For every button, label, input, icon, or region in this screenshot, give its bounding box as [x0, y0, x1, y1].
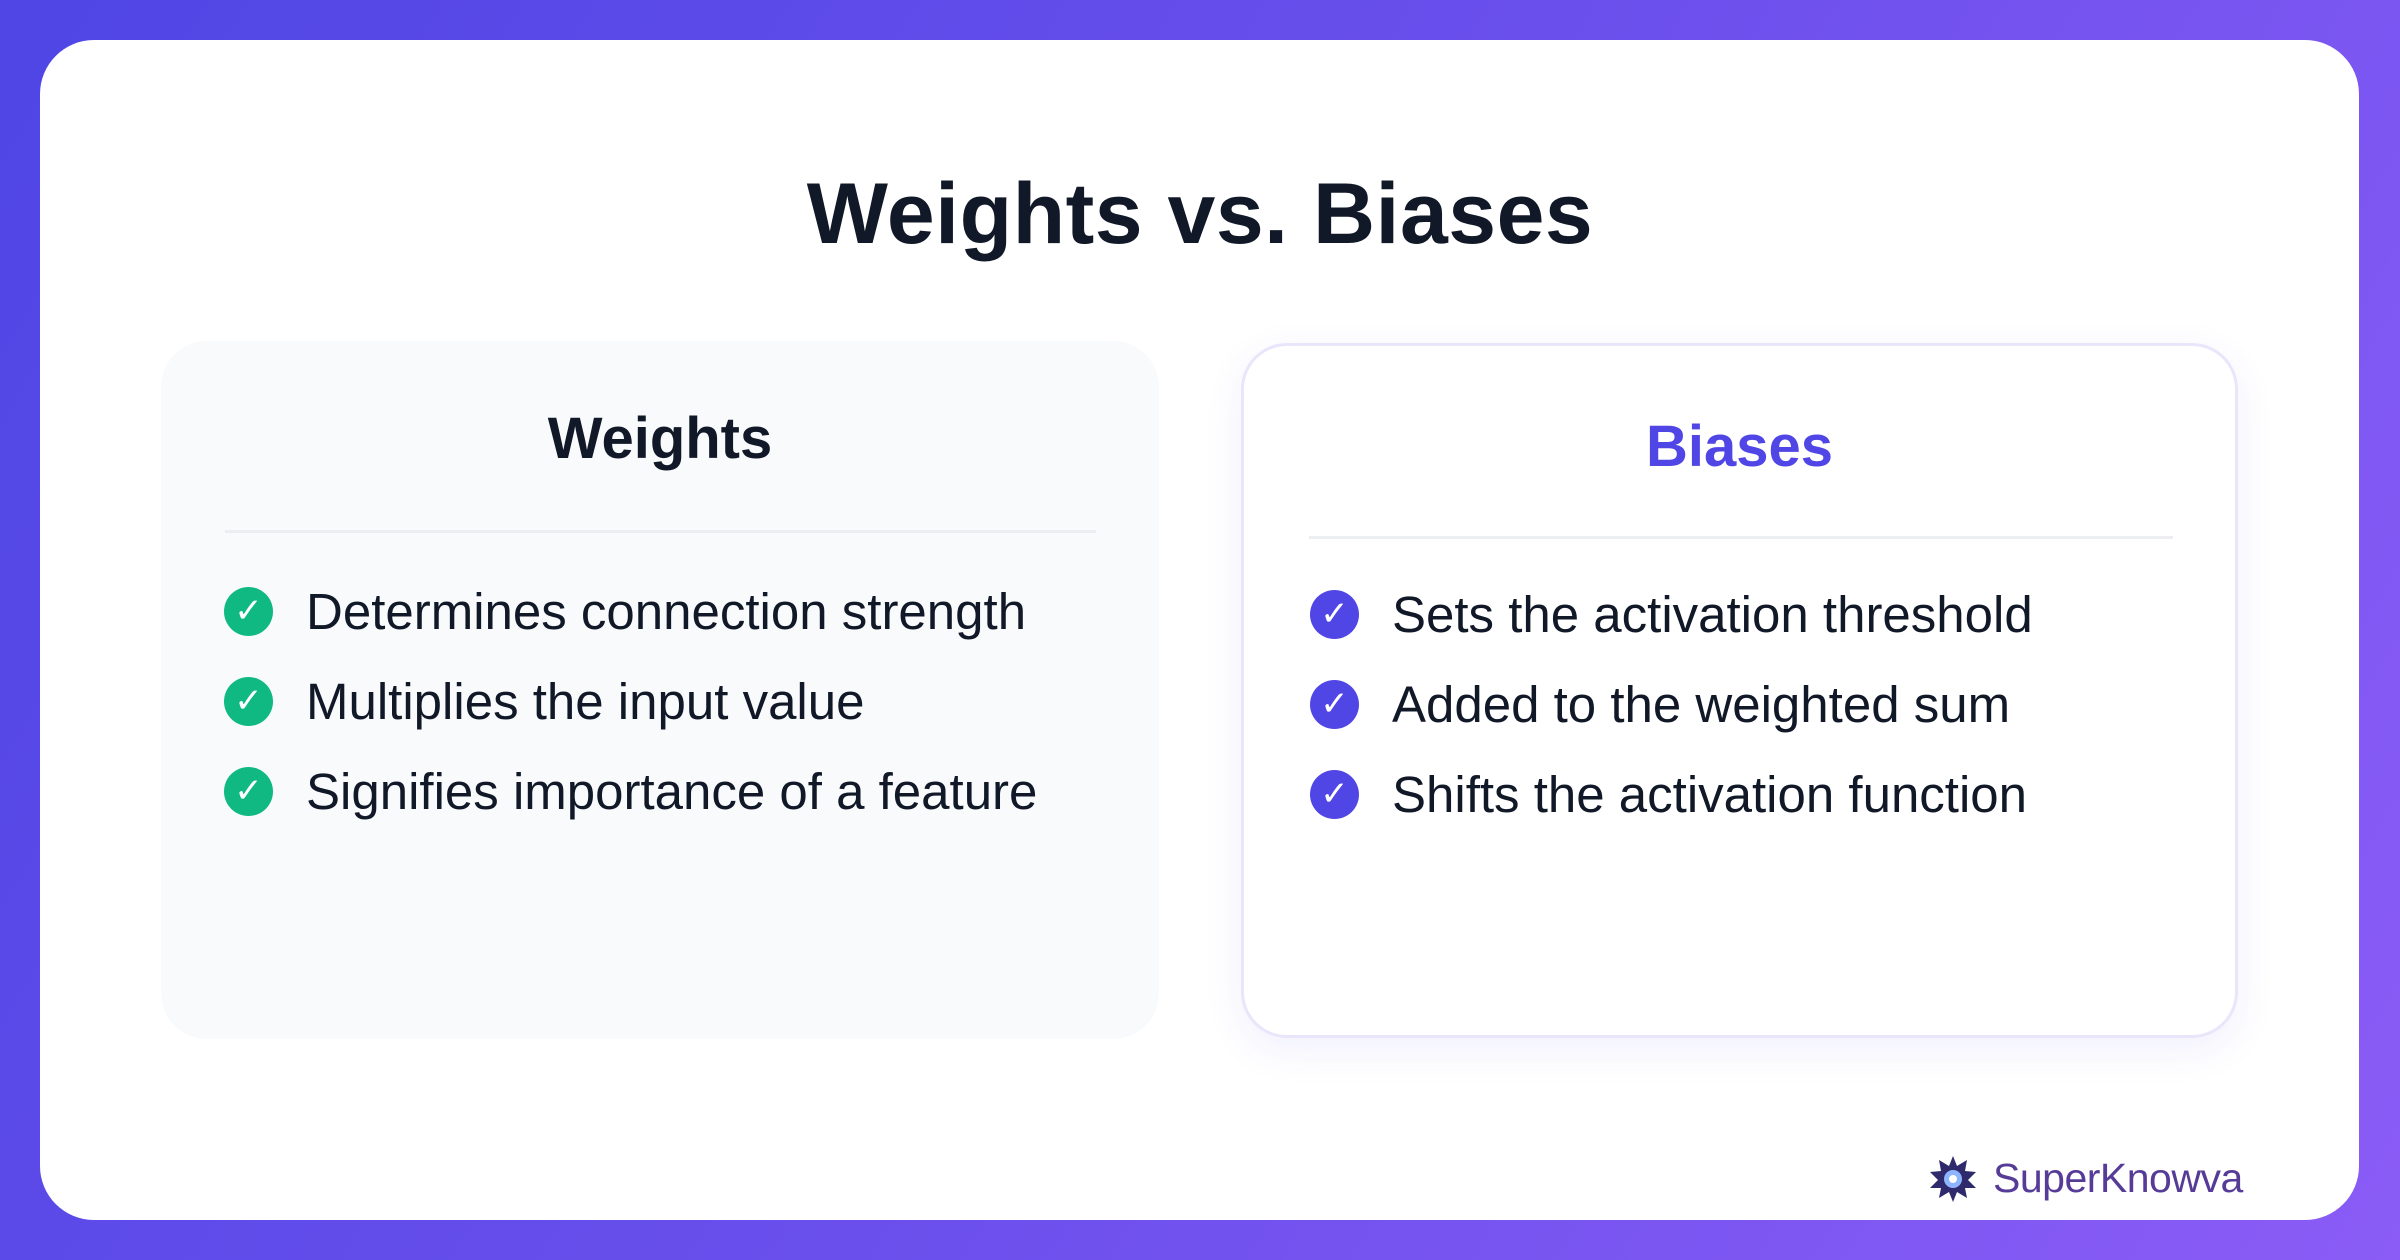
item: connection strength: ✓	[234, 591, 263, 631]
item: multiplies: Multiplies the input value	[306, 672, 864, 730]
item: multiplies: ✓	[234, 681, 263, 721]
icon: star	[1930, 1156, 1976, 1202]
brand text: SuperKnowva	[1993, 1154, 2243, 1200]
item: threshold: ✓	[1320, 594, 1349, 634]
logo	[1930, 1154, 2244, 1202]
heading: biases: Biases	[1646, 414, 1833, 479]
item: importance: Signifies importance of a feature	[306, 762, 1037, 820]
title: Weights vs. Biases	[807, 166, 1593, 262]
item: importance: ✓	[234, 771, 263, 811]
heading: weights: Weights	[548, 406, 772, 471]
item: connection strength: Determines connection strength	[306, 582, 1026, 640]
panel: biases	[1241, 343, 2238, 1038]
panel: weights	[161, 341, 1159, 1039]
item: threshold: Sets the activation threshold	[1392, 586, 2033, 642]
item: shifts: ✓	[1320, 774, 1349, 814]
item: weighted sum: ✓	[1320, 684, 1349, 724]
item: weighted sum: Added to the weighted sum	[1392, 676, 2010, 732]
item: shifts: Shifts the activation function	[1392, 766, 2027, 822]
